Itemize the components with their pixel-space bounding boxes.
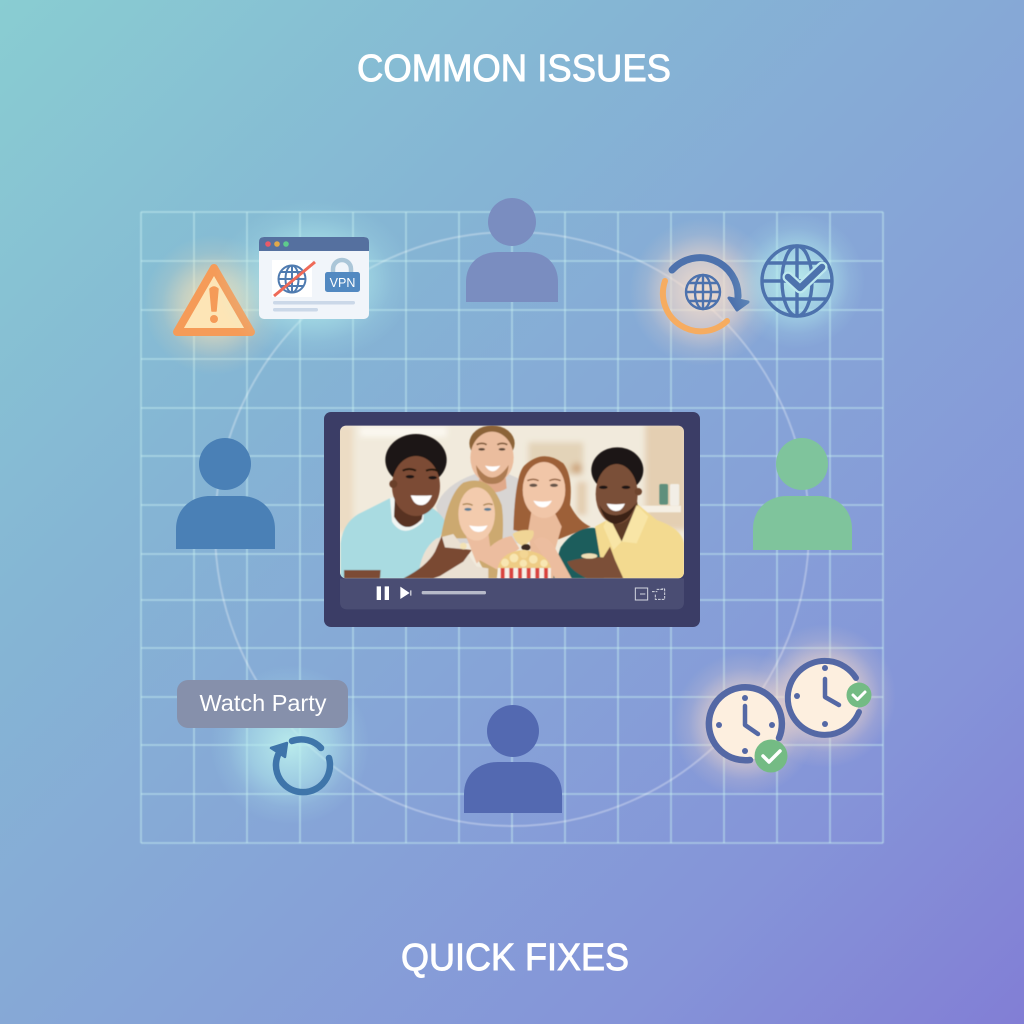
icon: browser window with blocked globe and VPN lock: VPN — [330, 276, 355, 290]
person icon: right — [753, 438, 852, 550]
popcorn bucket — [498, 550, 551, 579]
person icon: top — [466, 198, 558, 302]
clock: back — [788, 660, 872, 735]
title: common issues: COMMON ISSUES — [357, 48, 671, 90]
progress bar — [422, 591, 486, 594]
right hand — [567, 547, 623, 578]
icon: clocks with checkmarks — [673, 624, 896, 796]
button: watch party — [177, 680, 348, 728]
video player — [324, 412, 700, 627]
icon: globe with checkmark — [729, 213, 865, 349]
popcorn piece — [513, 530, 534, 546]
hand left — [403, 536, 472, 578]
icon: watch party refresh — [210, 665, 370, 825]
blonde woman — [441, 481, 503, 578]
popcorn hands — [479, 536, 519, 569]
icon: browser window with blocked globe and VPN lock — [214, 200, 414, 360]
icon: warning triangle — [144, 235, 284, 375]
person icon: bottom — [464, 705, 562, 813]
screen icons — [635, 588, 665, 600]
clock: front — [709, 687, 788, 772]
left man — [341, 497, 446, 578]
grid — [141, 212, 883, 843]
icon: globe refresh — [629, 218, 777, 366]
player frame — [324, 412, 700, 627]
back man — [436, 474, 518, 543]
photo: friends with popcorn — [333, 420, 690, 609]
connecting ring — [215, 232, 809, 826]
pause icon — [377, 586, 389, 600]
right man — [595, 503, 684, 578]
next icon — [400, 587, 411, 599]
bottom arm left man — [344, 570, 381, 578]
controls bar — [340, 578, 684, 609]
heading: quick fixes: QUICK FIXES — [401, 937, 629, 979]
person icon: left — [176, 438, 275, 549]
redhead woman — [513, 456, 591, 540]
button: watch party: Watch Party — [200, 690, 327, 716]
